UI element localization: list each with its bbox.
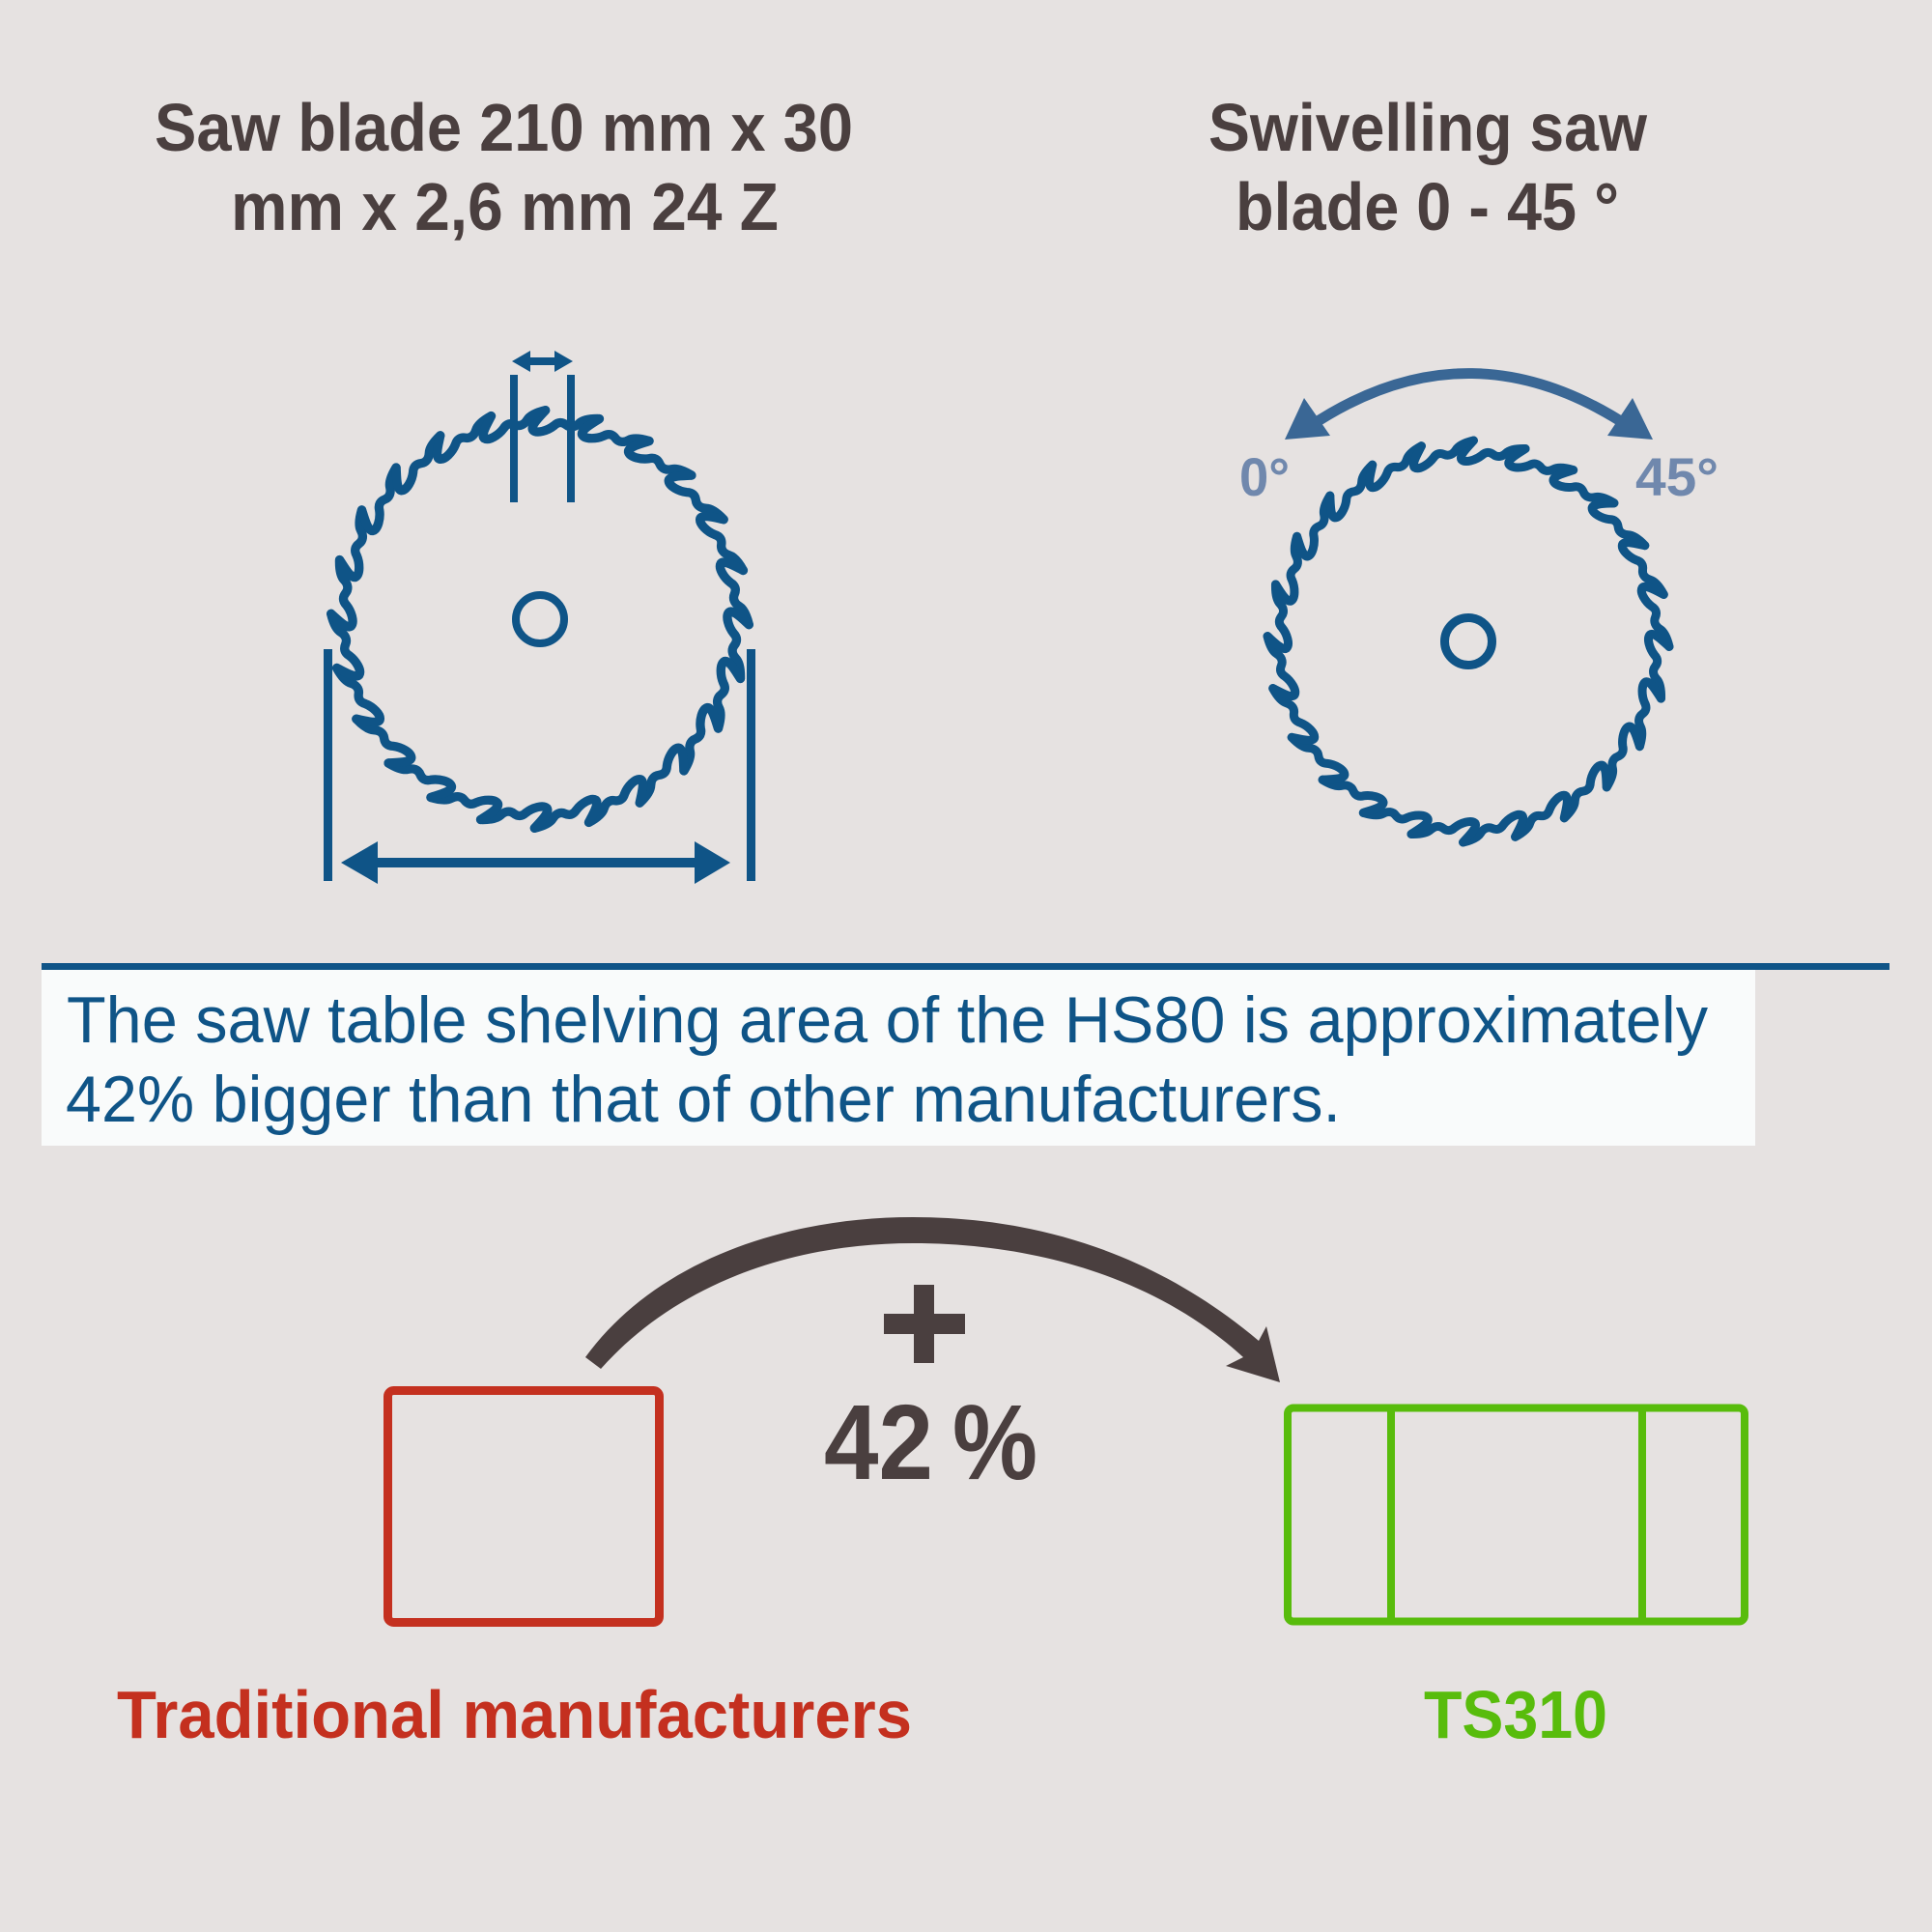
heading: saw blade size — [155, 90, 853, 244]
text block: 42% bigger than that of other manufacturers. — [66, 1063, 1341, 1136]
arrow: swivel range — [1285, 373, 1653, 440]
heading: swivelling saw blade: blade 0 - 45 ° — [1236, 169, 1619, 244]
arrow: increase from traditional to TS310 — [585, 1217, 1280, 1382]
label: 42 percent: % — [952, 1383, 1037, 1502]
diameter dimension lines — [324, 649, 755, 881]
heading: swivelling saw blade: Swivelling saw — [1208, 90, 1647, 165]
icon: blade arbor hole — [1445, 618, 1492, 665]
panel: shelving area statement — [42, 970, 1755, 1146]
label: 42 percent — [824, 1383, 1037, 1502]
icon: blade arbor hole — [516, 595, 564, 643]
diagram: swivelling blade — [1239, 373, 1719, 854]
icon: toothed saw blade outline — [1256, 429, 1681, 854]
diagram: saw blade with dimensions — [319, 351, 761, 884]
arrow: blade diameter — [341, 841, 730, 884]
box: traditional manufacturers area — [388, 1391, 659, 1623]
text block: The saw table shelving area of the HS80 is approximately — [67, 983, 1708, 1057]
label: 42 percent: 42 — [824, 1383, 933, 1502]
icon: plus sign — [884, 1285, 965, 1363]
label: 0 degrees: 0° — [1239, 446, 1290, 507]
text block — [66, 983, 1708, 1136]
heading: saw blade size: Saw blade 210 mm x 30 — [155, 90, 853, 165]
icon: toothed saw blade outline — [319, 398, 761, 840]
label: traditional manufacturers: Traditional manufacturers — [117, 1677, 912, 1752]
heading: saw blade size: mm x 2,6 mm 24 Z — [231, 169, 779, 244]
divider line — [42, 963, 1889, 970]
label: TS310: TS310 — [1424, 1677, 1607, 1752]
heading: swivelling saw blade — [1208, 90, 1647, 244]
arrow: blade thickness — [512, 351, 573, 372]
thickness dimension lines — [510, 375, 575, 502]
label: 45 degrees: 45° — [1635, 446, 1719, 507]
box: TS310 area — [1288, 1406, 1745, 1625]
